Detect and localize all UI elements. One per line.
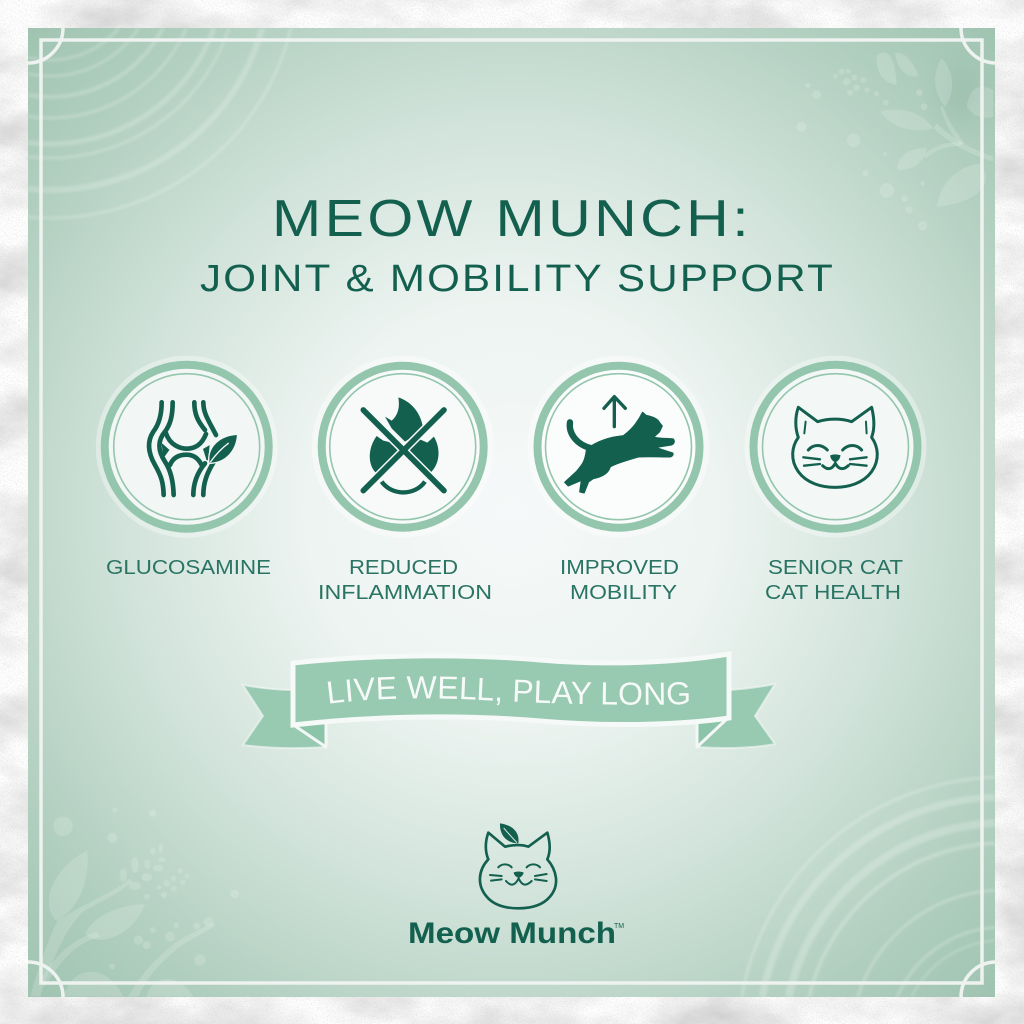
badge: senior cat health — [744, 356, 926, 538]
label: senior cat health: SENIOR CAT — [768, 557, 903, 579]
badge: improved mobility — [528, 356, 710, 538]
subtitle: JOINT & MOBILITY SUPPORT — [200, 258, 835, 300]
decorative leaves: top right — [797, 52, 993, 230]
badge: glucosamine — [96, 356, 278, 538]
brand logo — [408, 823, 624, 950]
label: senior cat health: CAT HEALTH — [765, 582, 901, 604]
label: senior cat health — [765, 557, 903, 604]
icon: crossed-out flame — [363, 397, 444, 492]
icon: leaping cat with up arrow — [565, 397, 674, 493]
icon: smiling cat face — [793, 407, 877, 487]
label: improved mobility — [560, 557, 679, 604]
label: reduced inflammation: INFLAMMATION — [318, 582, 492, 604]
badge: reduced inflammation — [312, 356, 494, 538]
label: reduced inflammation — [318, 557, 492, 604]
label: improved mobility: IMPROVED — [560, 557, 679, 579]
decorative leaves: bottom left — [30, 807, 239, 997]
icon: knee joint with leaf — [149, 402, 238, 495]
decorative rings: top left — [28, 28, 291, 218]
decorative rings: bottom right — [742, 777, 995, 997]
brand name: Meow Munch — [408, 917, 616, 950]
trademark: TM — [614, 923, 624, 930]
ribbon banner — [242, 651, 777, 749]
banner text: LIVE WELL, PLAY LONG — [328, 676, 689, 706]
label: reduced inflammation: REDUCED — [349, 557, 458, 579]
label: improved mobility: MOBILITY — [570, 582, 677, 604]
label: glucosamine: GLUCOSAMINE — [106, 557, 271, 579]
icon: cat logo with leaf — [480, 823, 556, 908]
title: MEOW MUNCH: — [272, 190, 752, 248]
